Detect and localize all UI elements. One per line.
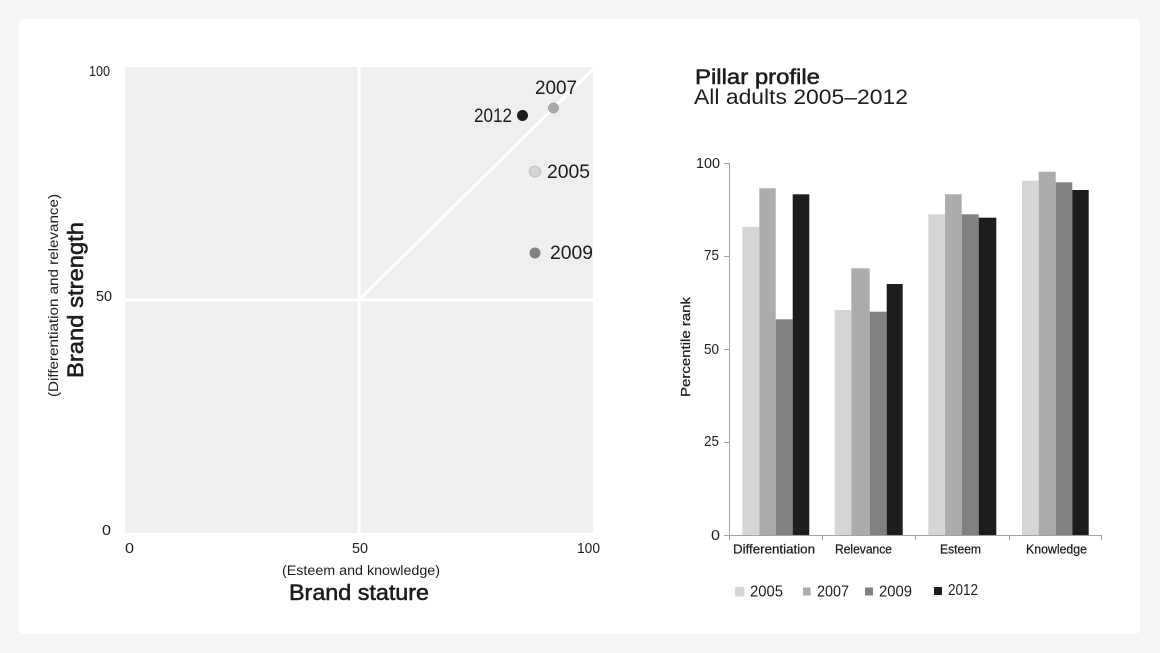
y axis numbers <box>89 64 112 539</box>
data point 2009: 2009 <box>550 243 593 264</box>
bars: Differentiation <box>742 188 809 535</box>
x axis numbers: 0 <box>125 541 134 557</box>
legend item 2009 <box>865 584 912 600</box>
data point 2012: 2012 <box>474 106 512 127</box>
y axis title: Brand strength <box>63 222 88 378</box>
y axis: 0 <box>711 528 720 544</box>
y axis subtitle: (Differentiation and relevance) <box>46 194 61 397</box>
legend <box>735 582 978 600</box>
category labels: Esteem <box>940 542 981 556</box>
y axis: 50 <box>704 342 719 358</box>
x axis subtitle: (Esteem and knowledge) <box>282 563 440 578</box>
panel: brand matrix <box>46 64 600 605</box>
heading <box>694 66 908 109</box>
legend item 2012 <box>934 582 978 599</box>
data point 2009 <box>530 243 593 264</box>
panel: pillar profile <box>678 66 1102 600</box>
category labels: Differentiation <box>733 542 815 556</box>
y axis: 75 <box>704 248 719 264</box>
x axis numbers: 100 <box>577 541 600 557</box>
x axis title: Brand stature <box>289 580 429 605</box>
legend item 2012: 2012 <box>948 582 978 599</box>
data point 2007 <box>535 78 577 114</box>
legend item 2009: 2009 <box>879 584 912 600</box>
data point 2005: 2005 <box>547 162 590 183</box>
bars: Esteem <box>928 194 996 535</box>
bar chart <box>742 172 1089 535</box>
heading: All adults 2005–2012 <box>694 86 908 109</box>
category labels <box>733 542 1087 556</box>
y axis <box>696 156 1102 544</box>
y axis: 100 <box>696 156 720 172</box>
category labels: Knowledge <box>1026 542 1087 556</box>
bars: Knowledge <box>1022 172 1089 535</box>
y axis numbers: 0 <box>102 523 111 539</box>
legend item 2007 <box>803 584 849 600</box>
legend item 2007: 2007 <box>817 584 849 600</box>
data point 2007: 2007 <box>535 78 577 99</box>
heading: Pillar profile <box>695 66 820 89</box>
category labels: Relevance <box>835 542 892 556</box>
y axis numbers: 50 <box>96 289 112 305</box>
plot area <box>125 67 593 533</box>
y axis numbers: 100 <box>89 64 110 80</box>
y axis: 25 <box>704 434 719 450</box>
y axis title: Percentile rank <box>678 296 693 397</box>
legend item 2005: 2005 <box>750 584 783 600</box>
bars: Relevance <box>835 268 903 535</box>
data point 2005 <box>530 162 590 183</box>
legend item 2005 <box>735 584 783 600</box>
x axis numbers: 50 <box>352 541 368 557</box>
x axis numbers <box>125 541 600 557</box>
